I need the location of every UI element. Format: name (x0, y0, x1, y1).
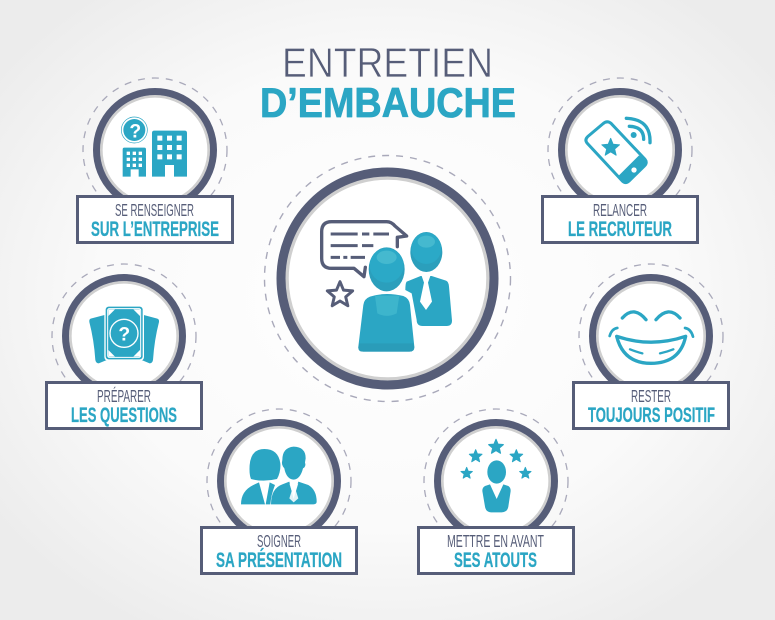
label box: SES ATOUTS (454, 549, 537, 572)
panel: rester toujours positif (574, 264, 728, 428)
icon: smiling face (610, 312, 693, 363)
panel: relancer le recruteur (542, 78, 698, 242)
icon: person with five stars (461, 439, 531, 512)
panel: mettre en avant ses atouts (418, 409, 574, 574)
panel: central interview (264, 156, 510, 402)
label box (574, 382, 728, 428)
icon: smartphone with star and signal (586, 118, 650, 182)
title: ENTRETIEN (282, 39, 493, 86)
label box: METTRE EN AVANT (447, 531, 544, 551)
icon: question cards (89, 305, 159, 363)
label box (78, 196, 232, 242)
label box: SOIGNER (257, 531, 301, 551)
title: D’EMBAUCHE (260, 79, 516, 126)
label box (542, 196, 698, 242)
label box: RELANCER (593, 200, 647, 220)
icon: woman and man silhouettes (241, 447, 317, 504)
label box: PRÉPARER (97, 386, 151, 406)
title (260, 39, 516, 126)
panel: preparer les questions (46, 264, 202, 428)
label box: LES QUESTIONS (71, 404, 177, 427)
panel: soigner sa presentation (202, 409, 356, 574)
label box (46, 382, 202, 428)
label box (202, 528, 356, 574)
icon: question cards: ? (118, 324, 130, 345)
label box: LE RECRUTEUR (568, 218, 672, 241)
panel: se renseigner sur l'entreprise (78, 78, 232, 242)
label box (418, 528, 574, 574)
label box: SE RENSEIGNER (115, 200, 194, 220)
label box: SUR L’ENTREPRISE (91, 218, 219, 241)
icon: buildings with question mark (121, 117, 187, 177)
label box: SA PRÉSENTATION (216, 549, 342, 572)
icon: buildings with question mark: ? (129, 121, 141, 142)
label box: RESTER (631, 386, 671, 406)
icon: two people with speech bubble and star (322, 222, 452, 352)
